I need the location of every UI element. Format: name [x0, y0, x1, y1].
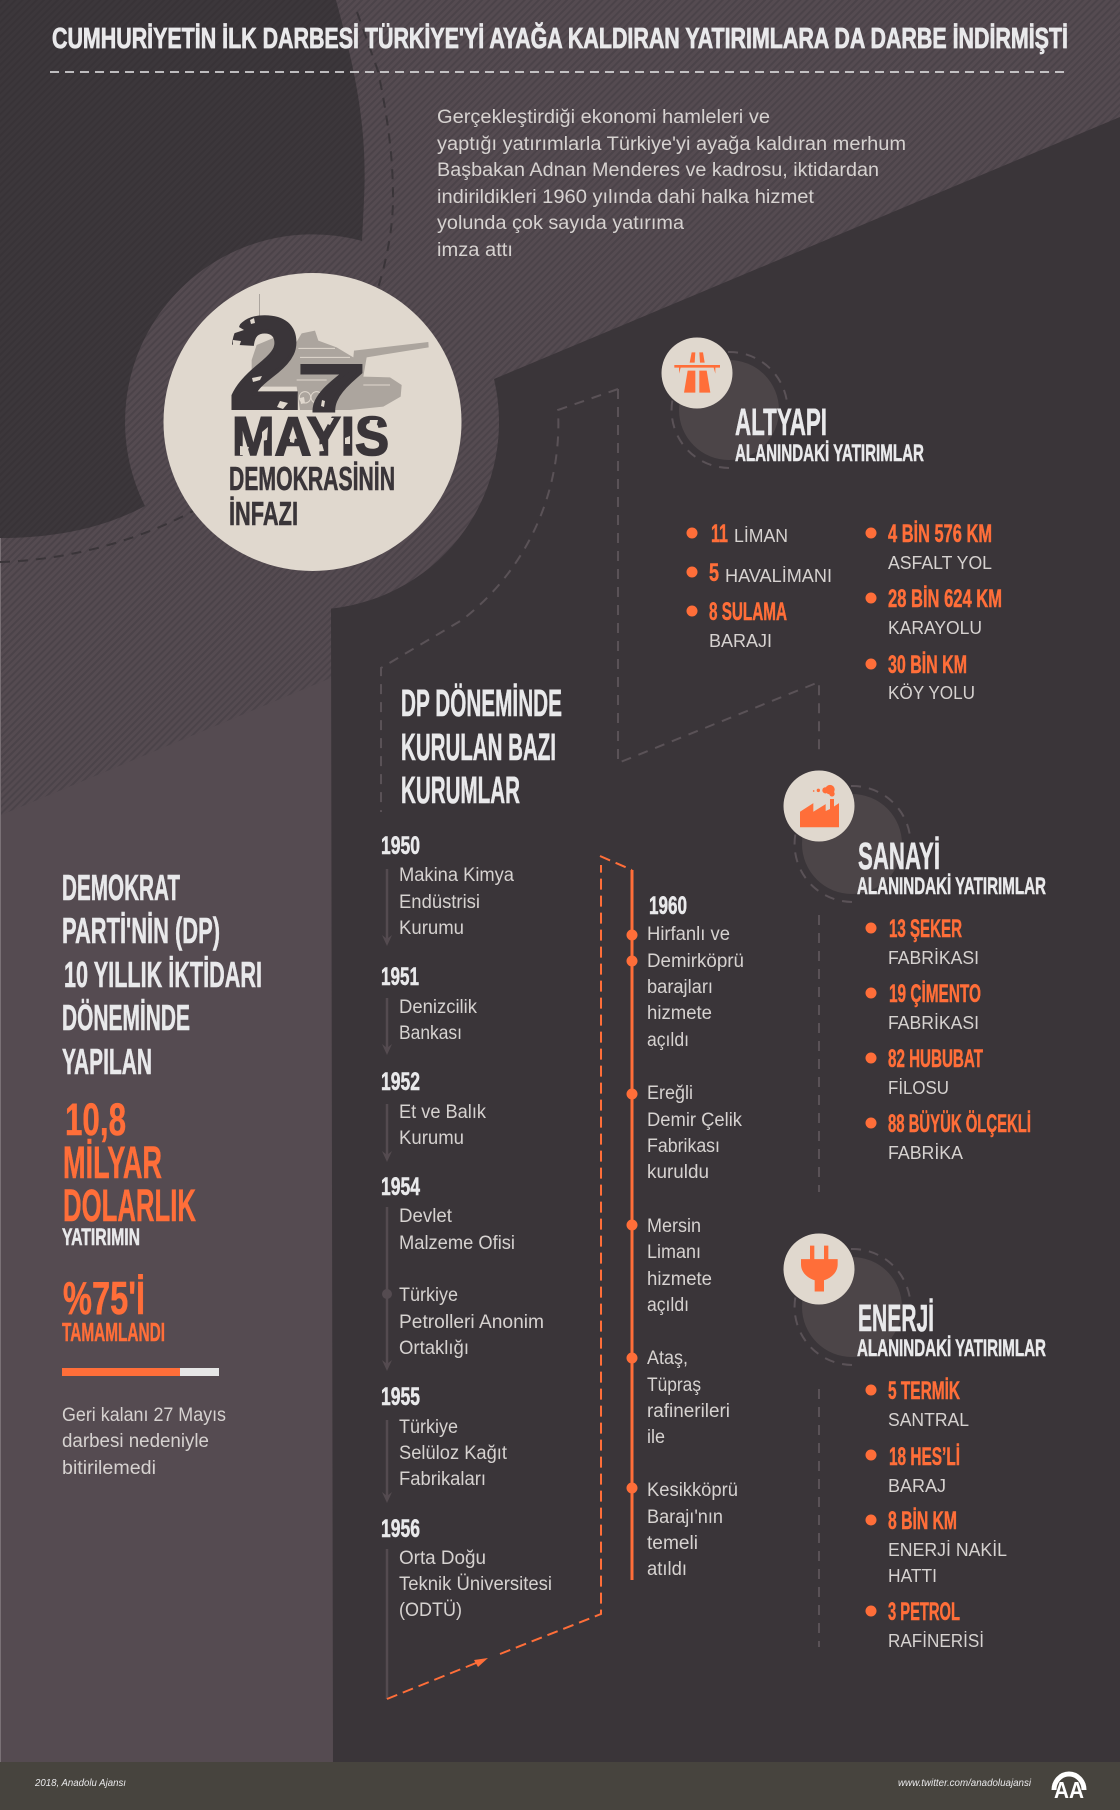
event: Hirfanlı: açıldı: [647, 1030, 689, 1051]
list: enerji items: 18 HES’Lİ: [889, 1443, 960, 1471]
event: Mersin: Limanı: [647, 1242, 701, 1263]
list: right column: [888, 520, 1002, 703]
panel: sanayi: [784, 770, 1046, 1163]
entry: 1955: 1955: [381, 1383, 420, 1411]
dark shape: top left: [0, 0, 365, 538]
list: left column: LİMAN: [734, 526, 788, 546]
logo: AA: AA: [1054, 1777, 1084, 1803]
timeline arrows: [382, 869, 392, 1699]
list: right column: KÖY YOLU: [888, 683, 975, 703]
list: sanayi items: FABRİKASI: [888, 948, 979, 968]
title divider: [50, 71, 1070, 73]
entry: 1954: Devlet: [399, 1206, 453, 1227]
event: Ereğli: [647, 1083, 742, 1183]
event: Ereğli: Ereğli: [647, 1083, 693, 1104]
list: right column: 4 BİN 576 KM: [888, 520, 992, 548]
badge circle: [164, 273, 462, 571]
intro paragraph: [437, 107, 906, 261]
list: enerji items: SANTRAL: [888, 1410, 969, 1430]
icon backing: [802, 1257, 902, 1357]
entry: 1951: Denizcilik: [399, 997, 477, 1018]
event: Ataş: rafinerileri: [647, 1401, 730, 1422]
list: enerji items: BARAJ: [888, 1476, 946, 1496]
icon circle: [662, 338, 732, 408]
entry: 1954: Ortaklığı: [399, 1338, 469, 1359]
key figure: %75: %75'İ: [63, 1272, 145, 1324]
footer bar: [0, 1762, 1120, 1810]
dashed ring: [795, 1249, 910, 1365]
list: sanayi items: FİLOSU: [888, 1078, 949, 1098]
entry: 1952: [381, 1068, 486, 1149]
badge: 27 Mayıs: [164, 273, 462, 571]
dashed ring: [795, 786, 910, 902]
twitter link: www.twitter.com/anadoluajansi: [898, 1778, 1032, 1789]
heading: ENERJİ: [858, 1298, 934, 1340]
list: sanayi items: FABRİKASI: [888, 1013, 979, 1033]
entry: 1951: 1951: [381, 963, 419, 991]
entry: 1952: 1952: [381, 1068, 420, 1096]
entry: 1950: 1950: [381, 832, 420, 860]
entry: 1952: Et ve Balık: [399, 1102, 486, 1123]
entry: 1956: (ODTÜ): [399, 1600, 462, 1621]
list: sanayi items: 19 ÇİMENTO: [889, 980, 981, 1008]
panel: left solid background: [1, 677, 333, 1762]
heading: KURUMLAR: [401, 770, 520, 812]
key figure: 10,8 milyar dolarlık: [63, 1094, 196, 1231]
big number 2: 2: [229, 290, 301, 436]
intro paragraph: imza attı: [437, 240, 513, 261]
list: enerji items: ENERJİ NAKİL: [888, 1540, 1007, 1560]
icon: plug: [801, 1246, 838, 1292]
list: enerji items: RAFİNERİSİ: [888, 1631, 984, 1651]
icon: tank silhouette: [252, 294, 429, 410]
dashed path: top ring connector: [0, 12, 393, 562]
list: sanayi items: 13 ŞEKER: [889, 915, 962, 943]
event: Kesikköprü: [647, 1480, 738, 1580]
heading: ALTYAPI: [735, 402, 827, 444]
list: left column: 8 SULAMA: [709, 598, 787, 626]
big number 7: 7: [298, 351, 365, 425]
heading: Demokrat Parti: 10 YILLIK İKTİDARI: [64, 954, 262, 995]
event: Hirfanlı: barajları: [647, 977, 713, 998]
bullet dots: [866, 922, 876, 1128]
event: Ereğli: Fabrikası: [647, 1136, 720, 1157]
key figure: 10,8 milyar dolarlık: 10,8: [65, 1094, 126, 1145]
heading: SANAYİ: [858, 836, 940, 878]
icon circle: [784, 1234, 854, 1304]
entry: 1956: Orta Doğu: [399, 1548, 486, 1569]
icon: factory: [800, 785, 839, 827]
entry: 1955: [381, 1383, 508, 1490]
year: 1960: [649, 892, 687, 920]
icon circle: [784, 770, 854, 842]
panel: 1960 timeline: [626, 870, 744, 1580]
panel: left summary: [62, 867, 262, 1479]
entry: 1954: Türkiye: [399, 1285, 458, 1306]
left edge line: [0, 538, 1, 1762]
bullet dots: [866, 1384, 876, 1616]
note text: [62, 1405, 226, 1479]
key figure: 10,8 milyar dolarlık: MİLYAR: [63, 1137, 162, 1188]
heading: Demokrat Parti: YAPILAN: [62, 1041, 152, 1082]
event: Mersin: açıldı: [647, 1295, 689, 1316]
note text: darbesi nedeniyle: [62, 1431, 209, 1452]
list: left column: 11: [711, 520, 728, 548]
event: Mersin: hizmete: [647, 1269, 712, 1290]
entry: 1954: Malzeme Ofisi: [399, 1233, 515, 1254]
event: Kesikköprü: temeli: [647, 1533, 698, 1554]
credit: 2018, Anadolu Ajansı: [34, 1778, 126, 1789]
list: right column: 28 BİN 624 KM: [888, 585, 1002, 613]
list: sanayi items: 82 HUBUBAT: [888, 1045, 983, 1073]
icon backing: [679, 360, 779, 460]
dashed ring: [672, 352, 787, 468]
entry: 1956: [381, 1515, 552, 1621]
entry: 1951: Bankası: [399, 1023, 462, 1044]
heading: Demokrat Parti: DEMOKRAT: [62, 867, 180, 908]
event: Ataş: Tüpraş: [647, 1375, 701, 1396]
note text: Geri kalanı 27 Mayıs: [62, 1405, 226, 1426]
event: Hirfanlı: Hirfanlı ve: [647, 924, 730, 945]
intro paragraph: Gerçekleştirdiği ekonomi hamleleri ve: [437, 107, 770, 128]
timeline line and dots: [626, 870, 638, 1580]
event: Hirfanlı: Demirköprü: [647, 951, 744, 972]
entry: 1955: Fabrikaları: [399, 1469, 486, 1490]
list: enerji items: HATTI: [888, 1566, 937, 1586]
dashed path: main route: [381, 389, 819, 1647]
list: enerji items: 5 TERMİK: [888, 1377, 960, 1405]
subheading: ALANINDAKİ YATIRIMLAR: [735, 440, 924, 467]
entry: 1952: Kurumu: [399, 1128, 464, 1149]
intro paragraph: indirildikleri 1960 yılında dahi halka hizmet: [437, 187, 815, 208]
intro paragraph: yaptığı yatırımlarla Türkiye'yi ayağa kaldıran merhum: [437, 134, 906, 155]
heading: [401, 682, 562, 812]
badge headline second line: İNFAZI: [229, 495, 298, 532]
list: left column: HAVALİMANI: [725, 566, 832, 586]
arrow: orange dashed link: [387, 856, 632, 1699]
entry: 1954: 1954: [381, 1173, 420, 1201]
key figure: 10,8 milyar dolarlık: DOLARLIK: [63, 1180, 196, 1231]
heading: KURULAN BAZI: [401, 727, 556, 769]
intro paragraph: Başbakan Adnan Menderes ve kadrosu, iktidardan: [437, 160, 879, 181]
event: Hirfanlı: hizmete: [647, 1003, 712, 1024]
event: Mersin: Mersin: [647, 1216, 701, 1237]
list: enerji items: 3 PETROL: [888, 1598, 960, 1626]
event: Ataş: [647, 1348, 730, 1448]
heading: DP DÖNEMİNDE: [401, 682, 562, 725]
list: enerji items: [888, 1377, 1007, 1651]
list: enerji items: 8 BİN KM: [888, 1507, 957, 1535]
intro paragraph: yolunda çok sayıda yatırıma: [437, 213, 684, 234]
heading: Demokrat Parti: [62, 867, 262, 1082]
note text: bitirilemedi: [62, 1458, 156, 1479]
list: left column: [709, 520, 832, 651]
panel: enerji: [784, 1234, 1046, 1651]
list: left column: 5: [709, 559, 719, 587]
event: Kesikköprü: Kesikköprü: [647, 1480, 738, 1501]
list: right column: ASFALT YOL: [888, 553, 992, 573]
event: Ataş: ile: [647, 1427, 665, 1448]
entry: 1950: Kurumu: [399, 918, 464, 939]
footer: [0, 1762, 1120, 1810]
label: tamamlandı: TAMAMLANDI: [62, 1317, 165, 1347]
panel: DP institutions: [381, 682, 562, 1699]
heading: Demokrat Parti: DÖNEMİNDE: [62, 997, 190, 1038]
list: right column: KARAYOLU: [888, 618, 982, 638]
list: sanayi items: [888, 915, 1031, 1163]
panel: altyapı: [662, 338, 1002, 703]
entry: 1951: [381, 963, 477, 1044]
progress bar: [62, 1368, 219, 1376]
icon backing: [802, 794, 902, 894]
list: sanayi items: FABRİKA: [888, 1143, 963, 1163]
entry: 1956: 1956: [381, 1515, 420, 1543]
entry: 1954: [381, 1173, 544, 1359]
entry: 1950: [381, 832, 514, 939]
event: Kesikköprü: Barajı'nın: [647, 1507, 723, 1528]
event: Mersin: [647, 1216, 712, 1316]
MAYIS wordmark: MAYIS: [232, 405, 389, 467]
heading: Demokrat Parti: PARTİ'NİN (DP): [62, 910, 220, 951]
list: left column: BARAJI: [709, 631, 772, 651]
entry: 1955: Selüloz Kağıt: [399, 1443, 508, 1464]
bullet dots: [686, 528, 876, 670]
event: Ataş: Ataş,: [647, 1348, 688, 1369]
entry: 1950: Endüstrisi: [399, 892, 480, 913]
event: Ereğli: Demir Çelik: [647, 1110, 742, 1131]
list: right column: 30 BİN KM: [888, 651, 967, 679]
label: yatırımın: YATIRIMIN: [62, 1224, 140, 1251]
entry: 1956: Teknik Üniversitesi: [399, 1574, 552, 1595]
event: Hirfanlı: [647, 924, 744, 1051]
entry: 1950: Makina Kimya: [399, 865, 514, 886]
entry: 1955: Türkiye: [399, 1417, 458, 1438]
event: Kesikköprü: atıldı: [647, 1559, 687, 1580]
entry: 1954: Petrolleri Anonim: [399, 1312, 544, 1333]
dark shape: right main area: [331, 117, 1120, 1762]
badge headline: DEMOKRASİNİN: [229, 460, 395, 497]
event: Ereğli: kuruldu: [647, 1162, 709, 1183]
icon: highway: [674, 352, 720, 393]
